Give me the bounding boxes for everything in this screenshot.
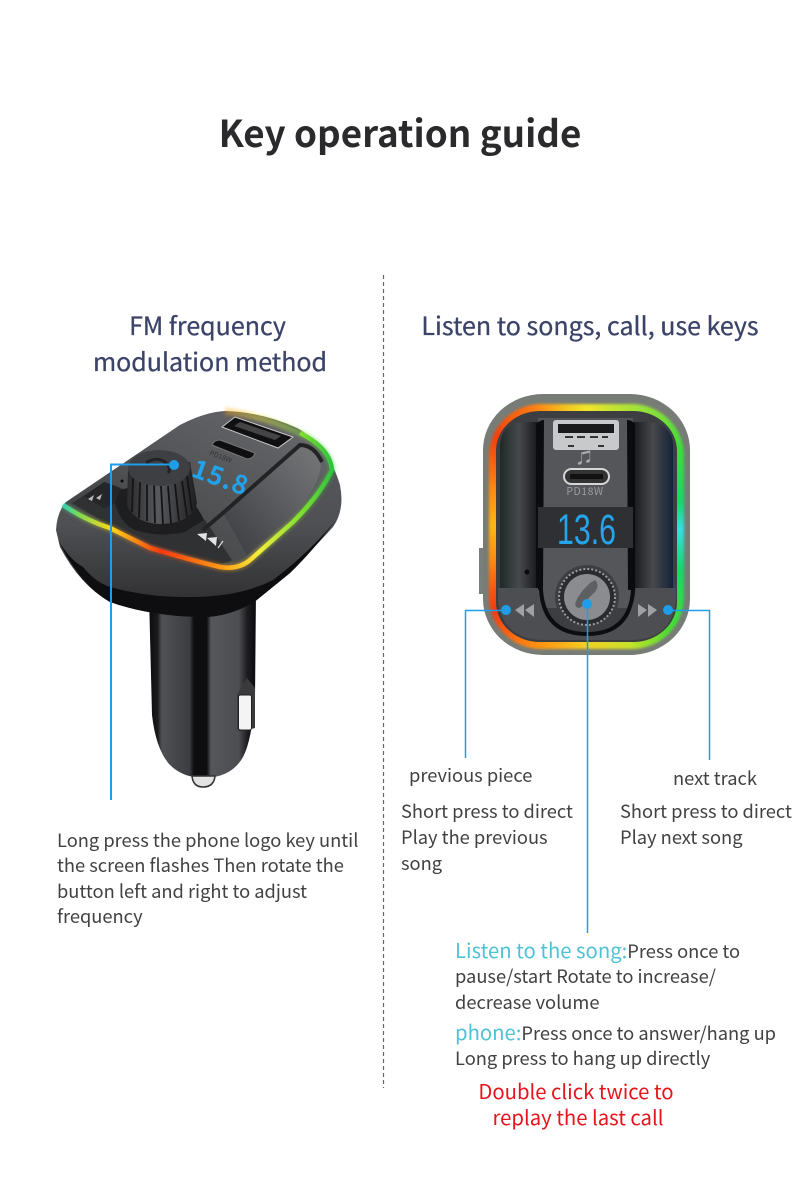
callout line: knob on angled view <box>111 460 179 800</box>
text: next track description: Short press to direct <box>620 798 792 824</box>
text: frequency instructions: button left and right to adjust <box>57 878 307 904</box>
text: listen to the song: pause/start Rotate to increase/ <box>455 963 716 989</box>
device body <box>56 411 341 617</box>
LED ring <box>489 404 684 649</box>
next symbols <box>638 604 657 617</box>
text: previous piece description: song <box>401 850 443 876</box>
text: listen to the song <box>455 934 740 1015</box>
top plate <box>65 413 331 568</box>
callout line: next track <box>663 605 710 760</box>
side clip <box>237 678 255 732</box>
title: Key operation guide <box>219 104 581 158</box>
black underside <box>58 520 336 617</box>
knob base <box>115 480 204 535</box>
heading: FM frequency modulation method <box>93 307 327 379</box>
next button symbols <box>197 533 217 546</box>
text: previous piece description: Short press to direct <box>401 798 573 824</box>
text: previous piece description: Play the previous <box>401 824 548 850</box>
text: double click note <box>478 1075 674 1131</box>
left pad <box>500 422 538 588</box>
display panel <box>538 507 633 548</box>
display digits: 13.6 <box>557 506 616 554</box>
icon: music note: ♫ <box>577 447 593 468</box>
device shell <box>483 394 690 655</box>
text: previous piece description <box>401 798 573 876</box>
inner face <box>496 411 677 642</box>
label: previous piece: previous piece <box>409 762 532 788</box>
digital display: 15.8 <box>187 449 255 504</box>
USB-C port <box>212 440 255 459</box>
USB port <box>222 417 293 448</box>
plug tip <box>192 776 215 787</box>
text: phone: Long press to hang up directly <box>455 1045 711 1071</box>
side button <box>479 548 486 594</box>
text: phone <box>455 1016 776 1071</box>
text: frequency instructions: frequency <box>57 903 143 929</box>
heading: FM frequency modulation method: modulation method <box>93 343 327 379</box>
previous button <box>84 482 120 508</box>
text: double click note: replay the last call <box>493 1101 663 1131</box>
bottom arc <box>498 588 676 640</box>
front dark area <box>72 482 232 564</box>
text: next track description <box>620 798 792 850</box>
right pad <box>633 422 673 588</box>
heading: FM frequency modulation method: FM frequency <box>129 307 286 343</box>
text: frequency instructions: Long press the phone logo key until <box>57 827 358 853</box>
previous symbols <box>515 604 534 617</box>
knob <box>127 462 197 524</box>
dashed divider <box>382 275 384 1088</box>
microphone hole <box>524 570 530 574</box>
microphone hole <box>120 480 124 482</box>
text: listen to the song: decrease volume <box>455 989 599 1015</box>
LED strip glow <box>63 411 332 568</box>
text: next track description: Play next song <box>620 824 743 850</box>
text: listen to the song: Listen to the song:Press once to <box>455 934 740 964</box>
product: angled FM transmitter <box>56 411 341 787</box>
USB-C port <box>564 469 609 484</box>
callout line: previous piece <box>466 605 511 758</box>
text: phone: phone:Press once to answer/hang up <box>455 1016 776 1046</box>
centre plate <box>538 418 633 608</box>
product: front view FM transmitter <box>479 394 690 655</box>
text: frequency instructions <box>57 827 358 929</box>
text: double click note: Double click twice to <box>478 1075 674 1105</box>
PD18W label: PD18W <box>566 484 604 499</box>
label: next track: next track <box>673 765 757 791</box>
right pad <box>223 445 321 555</box>
PD18W label: PD18W <box>208 448 233 466</box>
heading: listen to songs, call, use keys: Listen to songs, call, use keys <box>421 307 759 343</box>
callout line: knob front view <box>582 599 592 933</box>
LED strip <box>63 433 332 568</box>
plug barrel <box>149 590 256 778</box>
text: frequency instructions: the screen flashes Then rotate the <box>57 852 344 878</box>
knob <box>555 565 619 629</box>
USB port <box>553 420 619 450</box>
